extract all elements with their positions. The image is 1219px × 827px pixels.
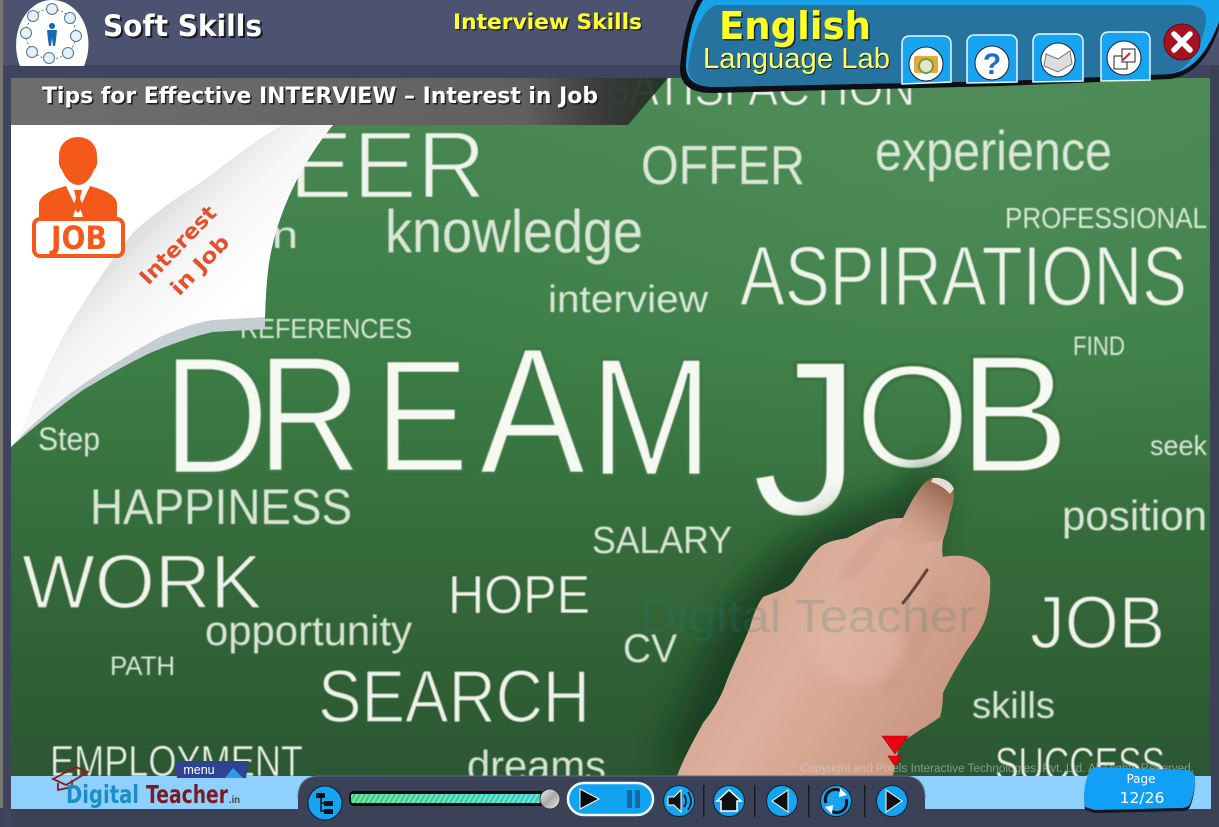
chalk word: JOB: B (958, 320, 1070, 508)
chalk words, small: dreams (467, 742, 606, 789)
heading: Interview Skills: Interview Skills (453, 10, 642, 34)
icon: home (714, 786, 744, 816)
chalk words, large thin strokes: WORK (22, 540, 262, 625)
icon: next (876, 786, 908, 816)
icon: close button (1164, 24, 1200, 60)
copyright line: Copyright and Pixels Interactive Technologies, Pvt. Ltd. All Rights Reserved. (800, 763, 1194, 775)
chalk words, small (38, 119, 1208, 789)
chalk words, large thin strokes: SEARCH (318, 655, 590, 738)
hand shadow on board (660, 466, 945, 780)
title: English (703, 4, 891, 76)
control panel (298, 776, 925, 827)
icon buttons (902, 32, 1150, 84)
chalk words, small: REFERENCES (240, 313, 412, 344)
logo: Digital Teacher: .in (229, 795, 240, 806)
chalk words, large thin strokes: EMPLOYMENT (50, 737, 303, 786)
page number badge: 12/26 (1120, 789, 1164, 807)
control separators (703, 785, 866, 817)
chalk word: JOB: J (751, 315, 862, 563)
chalk words, small: experience (875, 119, 1112, 182)
page curl panel (11, 125, 333, 447)
logo: Digital Teacher: Teacher (146, 780, 228, 809)
chalk word: DREAM: A (480, 311, 585, 511)
icon: job seeker: JOB (49, 219, 107, 257)
chalk word: JOB: O (855, 335, 970, 500)
chalk words, large thin strokes: SUCCESS (995, 738, 1165, 790)
title: English: Language Lab (704, 44, 891, 76)
curl label: Interest (135, 201, 221, 289)
red pointer (882, 736, 908, 766)
icon buttons: ? (983, 48, 1001, 81)
logo: Digital Teacher (53, 767, 240, 809)
icon: previous (766, 786, 798, 816)
chalk words, small: FIND (1073, 331, 1125, 361)
chalk words, large thin strokes: HOPE (448, 565, 590, 625)
icon: job seeker (34, 137, 123, 257)
chalk words, small: seek (1150, 430, 1208, 461)
icon: contents tree (308, 786, 342, 820)
title: English: English (720, 6, 872, 50)
chalk words, small: PATH (110, 651, 175, 681)
chalk words, small: CV (623, 627, 677, 671)
chalk words, small: HAPPINESS (90, 479, 352, 535)
heading: Soft Skills: Soft Skills (105, 11, 264, 45)
title band: Tips for Effective INTERVIEW – Interest in Job (42, 84, 598, 109)
heading: Soft Skills: Soft Skills (103, 9, 262, 43)
chalk words, small: knowledge (385, 198, 643, 265)
chalk words, small: position (1062, 492, 1207, 539)
chalk words, large thin strokes: SATISFACTION (600, 60, 915, 116)
footer bar (0, 776, 1219, 827)
chalk words, large thin strokes: JOB (1030, 581, 1165, 664)
icon: refresh (820, 786, 852, 816)
logo: Digital Teacher: Digital (66, 780, 139, 809)
chalk words, small: opportunity (205, 607, 412, 654)
title: English: English (719, 4, 871, 48)
chalk words, large thin strokes: CAREER (86, 112, 486, 219)
chalk word: DREAM: R (257, 321, 362, 506)
menu tab (175, 761, 249, 778)
chalk word: DREAM: D (163, 323, 269, 509)
chalk words, small: Step (38, 421, 100, 457)
icon: speaker (664, 786, 694, 816)
heading: Interview Skills: Interview Skills (454, 12, 644, 36)
chalk word: DREAM: M (590, 323, 713, 511)
watermark: Digital Teacher (640, 590, 975, 642)
title band (11, 78, 668, 125)
title: English: Language Lab (703, 43, 890, 75)
title band: Tips for Effective INTERVIEW – Interest in Job (44, 86, 600, 110)
icon: soft skills logo (16, 0, 88, 66)
page number badge (1084, 767, 1195, 813)
play pause control (568, 783, 653, 815)
progress bar (349, 789, 560, 809)
chalk word: DREAM: E (375, 327, 469, 505)
curl label: in Job (166, 230, 234, 300)
hand pointing at the board (677, 478, 990, 776)
panel: English Language Lab (680, 0, 1219, 93)
chalk words, small: SALARY (592, 520, 732, 562)
menu tab: menu (183, 763, 215, 777)
chalk words, small: interview (548, 279, 709, 321)
page number badge: Page (1126, 772, 1156, 786)
chalk words, small: skills (972, 685, 1055, 726)
chalk words, small: OFFER (641, 134, 805, 196)
chalk words, small: n (272, 215, 298, 257)
